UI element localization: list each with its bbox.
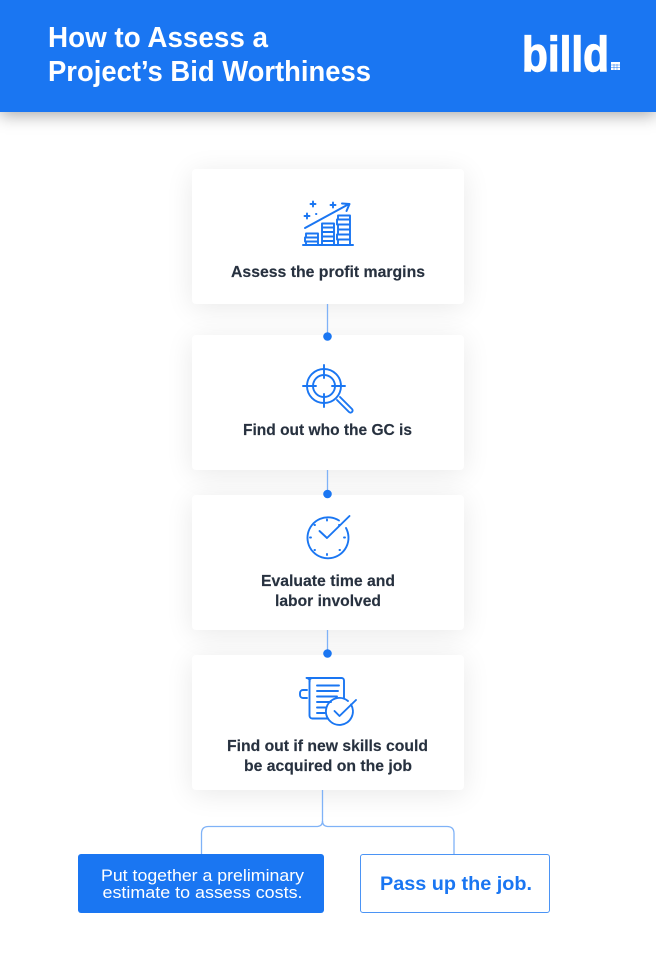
- label: Find out who the GC is: [243, 422, 412, 439]
- label: [227, 738, 428, 775]
- title: Project’s Bid Worthiness: [48, 56, 371, 88]
- outcome box: preliminary estimate: estimate to assess costs.: [102, 884, 302, 902]
- icon: document with check badge: [300, 678, 356, 725]
- icon: rising coin stacks: [303, 202, 353, 245]
- outcome box: pass up the job: [360, 854, 550, 913]
- title: How to Assess a: [48, 22, 269, 54]
- icon: clock with check mark: [307, 516, 350, 558]
- label: Evaluate time and: [261, 573, 395, 590]
- label: labor involved: [275, 593, 381, 610]
- panel: find the GC: [192, 335, 464, 470]
- panel: time and labor: [192, 495, 464, 630]
- icon: magnifier with target: [303, 365, 353, 413]
- outcome box: preliminary estimate: [78, 854, 324, 913]
- panel: new skills: [192, 655, 464, 790]
- label: [261, 573, 395, 610]
- label: Find out if new skills could: [227, 738, 428, 755]
- label: Assess the profit margins: [231, 264, 425, 281]
- title: [48, 22, 371, 88]
- outcome box: pass up the job: Pass up the job.: [380, 873, 532, 895]
- panel: profit margins: [192, 169, 464, 304]
- header banner: [0, 0, 656, 112]
- outcome box: preliminary estimate: Put together a preliminary: [101, 867, 305, 885]
- label: be acquired on the job: [244, 758, 412, 775]
